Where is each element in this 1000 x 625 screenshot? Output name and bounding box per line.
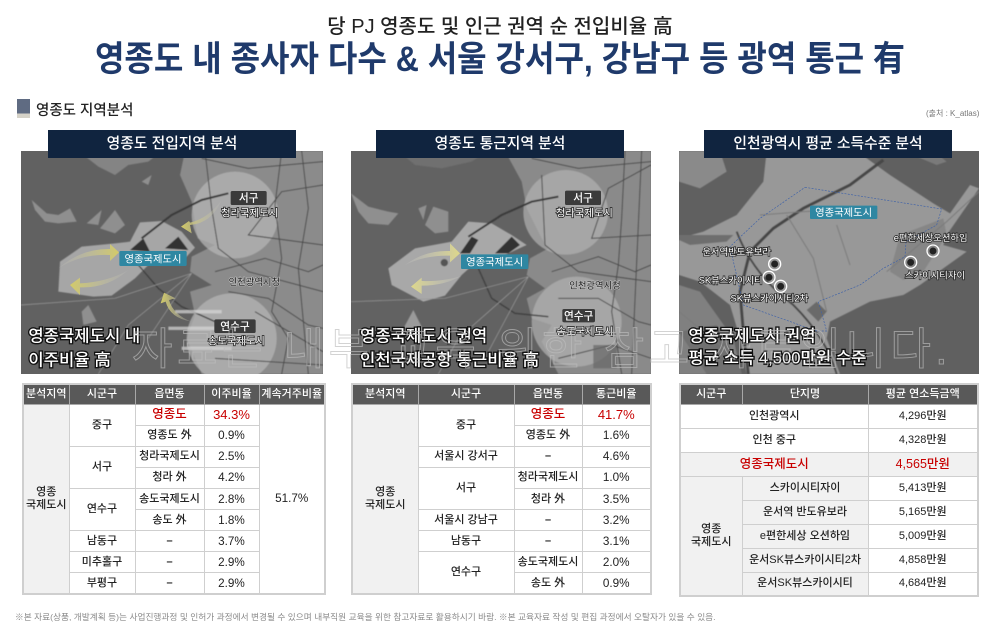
table: commute ratio: 송도 外 bbox=[531, 577, 565, 589]
section heading: 영종도 지역분석 bbox=[36, 103, 133, 119]
table: move-in ratio: 2.9% bbox=[218, 556, 245, 569]
label: Seo-gu bbox=[556, 191, 613, 220]
table: move-in ratio: 읍면동 bbox=[154, 388, 185, 400]
table: average income: 5,413만원 bbox=[899, 482, 947, 494]
table: commute ratio: 시군구 bbox=[451, 388, 481, 400]
caption: 인천국제공항 통근비율 高 bbox=[360, 351, 539, 370]
table: average income: 시군구 bbox=[696, 388, 726, 400]
table: average income: 영종국제도시 bbox=[740, 456, 809, 470]
label: Seo-gu: 서구 bbox=[239, 193, 259, 205]
table: commute ratio: 영종도 外 bbox=[526, 429, 570, 441]
table: average income bbox=[679, 383, 979, 597]
label: Yeongjong bbox=[810, 206, 877, 219]
panel heading: move-in analysis: 영종도 전입지역 분석 bbox=[107, 136, 237, 152]
label: Yeonsu-gu: 송도국제도시 bbox=[208, 335, 265, 347]
table: move-in ratio: 연수구 bbox=[87, 503, 117, 515]
label: Seo-gu: 청라국제도시 bbox=[221, 207, 278, 219]
table: move-in ratio bbox=[22, 383, 326, 595]
table: move-in ratio: 청라 外 bbox=[152, 471, 187, 483]
panel heading: commute analysis bbox=[376, 130, 624, 158]
table: average income: 4,565만원 bbox=[896, 456, 950, 470]
label: city hall: 인천광역시청 bbox=[569, 279, 621, 290]
table: commute ratio: 청라 外 bbox=[531, 493, 565, 505]
markers: apartment complexes bbox=[763, 245, 939, 292]
label: city hall: 인천광역시청 bbox=[229, 276, 280, 287]
arrow: from Cheongna bbox=[181, 200, 222, 233]
table: commute ratio: 읍면동 bbox=[533, 388, 563, 400]
source note: (출처 : K_atlas) bbox=[926, 109, 979, 118]
label: Yeongjong bbox=[461, 254, 528, 269]
table: commute ratio: 영종도 bbox=[531, 407, 565, 421]
labels: complexes: SK뷰스카이시티2차 bbox=[730, 293, 809, 304]
arrow: from Songdo bbox=[161, 293, 192, 322]
label: Seo-gu: 청라국제도시 bbox=[556, 208, 613, 220]
title: 영종도 내 종사자 다수 & 서울 강서구, 강남구 등 광역 통근 有 bbox=[95, 40, 905, 79]
table: average income: e편한세상 오션하임 bbox=[760, 530, 850, 542]
footnote: ※본 자료(상품, 개발계획 등)는 사업진행과정 및 인허가 과정에서 변경될 수 있으며 내부직원 교육을 위한 참고자료로 활용하시기 바람. ※본 교육자료 작성 및 편집 과정에서 오탈자가 있을 수 있음. bbox=[15, 612, 716, 622]
table: commute ratio: 41.7% bbox=[598, 407, 635, 422]
table: commute ratio: 서울시 강서구 bbox=[434, 450, 498, 462]
table: commute ratio: 통근비율 bbox=[596, 388, 636, 400]
table: move-in ratio: 송도 外 bbox=[152, 514, 187, 526]
table: move-in ratio: 계속거주비율 bbox=[261, 388, 322, 400]
arrow: airport outgoing bbox=[70, 270, 128, 295]
table: average income: 국제도시 bbox=[691, 536, 731, 548]
boundary: Yeongjong district bbox=[730, 187, 942, 331]
table: average income: 4,684만원 bbox=[899, 577, 947, 589]
caption: 영종국제도시 권역 bbox=[688, 327, 816, 346]
table: move-in ratio: 4.2% bbox=[218, 471, 245, 484]
table: move-in ratio: 2.5% bbox=[218, 450, 245, 463]
label: Yeonsu-gu: 송도국제도시 bbox=[556, 326, 614, 338]
caption: 영종국제도시 내 bbox=[28, 327, 140, 346]
table: commute ratio: 중구 bbox=[456, 419, 476, 431]
panel heading: commute analysis: 영종도 통근지역 분석 bbox=[435, 136, 565, 152]
label: Yeongjong: 영종국제도시 bbox=[124, 253, 182, 265]
table: move-in ratio: 부평구 bbox=[87, 577, 117, 589]
table: average income: 인천 중구 bbox=[752, 434, 796, 446]
label: Yeonsu-gu: 연수구 bbox=[564, 309, 594, 322]
table: move-in ratio: 0.9% bbox=[218, 429, 245, 442]
table: commute ratio: 남동구 bbox=[451, 535, 481, 547]
table: move-in ratio: 국제도시 bbox=[26, 499, 66, 511]
table: commute ratio: 서울시 강남구 bbox=[434, 514, 498, 526]
label: Yeonsu-gu: 연수구 bbox=[220, 320, 250, 333]
caption bbox=[28, 327, 140, 370]
labels: complexes bbox=[699, 232, 968, 304]
labels: complexes: 운서역반도유보라 bbox=[702, 247, 771, 257]
table: move-in ratio: 영종도 bbox=[152, 407, 187, 421]
table: commute ratio: 송도국제도시 bbox=[518, 556, 578, 568]
table: move-in ratio: 34.3% bbox=[213, 407, 250, 422]
table: move-in ratio: 이주비율 bbox=[211, 388, 252, 400]
table: commute ratio: 분석지역 bbox=[365, 388, 405, 400]
arrow: west outgoing bbox=[58, 244, 119, 268]
table: commute ratio: 청라국제도시 bbox=[518, 471, 578, 483]
table: move-in ratio: 서구 bbox=[92, 461, 112, 473]
labels: complexes: e편한세상오션하임 bbox=[894, 232, 968, 243]
table: commute ratio: 영종 bbox=[375, 486, 395, 498]
table: average income: 운서SK뷰스카이시티 bbox=[757, 577, 853, 589]
table: average income: 스카이시티자이 bbox=[770, 482, 840, 494]
map: income level bbox=[679, 151, 979, 374]
table: move-in ratio: 2.9% bbox=[218, 577, 245, 590]
table: commute ratio: – bbox=[545, 535, 551, 547]
caption bbox=[688, 327, 866, 368]
table: move-in ratio: 시군구 bbox=[87, 388, 117, 400]
table: move-in ratio: 1.8% bbox=[218, 514, 245, 527]
panel heading: income analysis bbox=[704, 130, 952, 158]
caption bbox=[360, 327, 539, 370]
table: move-in ratio: 중구 bbox=[92, 419, 112, 431]
table: average income: 단지명 bbox=[790, 388, 820, 400]
table: average income: 평균 연소득금액 bbox=[886, 388, 960, 400]
label: Yeongjong bbox=[119, 251, 187, 266]
table: average income: 영종 bbox=[701, 523, 721, 535]
icon: section marker bbox=[17, 99, 30, 118]
table: commute ratio: 4.6% bbox=[603, 450, 630, 463]
table: move-in ratio: 송도국제도시 bbox=[139, 493, 200, 505]
arrow: to airport bbox=[405, 243, 460, 265]
subtitle: 당 PJ 영종도 및 인근 권역 순 전입비율 高 bbox=[327, 16, 673, 38]
panel heading: move-in analysis bbox=[48, 130, 296, 158]
label: Seo-gu: 서구 bbox=[573, 193, 593, 205]
table: move-in ratio: – bbox=[166, 556, 173, 568]
caption: 이주비율 高 bbox=[28, 351, 111, 370]
label: Seo-gu bbox=[221, 191, 278, 219]
labels: complexes: 스카이시티자이 bbox=[905, 270, 965, 280]
table: move-in ratio: 2.8% bbox=[218, 493, 245, 506]
table: average income: 운서SK뷰스카이시티2차 bbox=[749, 554, 861, 566]
table: average income: 5,165만원 bbox=[899, 506, 947, 518]
label: Yeonsu-gu bbox=[208, 319, 265, 347]
table: commute ratio: – bbox=[545, 450, 551, 462]
label: Yeonsu-gu bbox=[556, 309, 614, 338]
table: move-in ratio: 51.7% bbox=[275, 492, 308, 505]
table: average income: 4,328만원 bbox=[899, 434, 947, 446]
labels: complexes: SK뷰스카이시티 bbox=[699, 276, 763, 286]
table: commute ratio bbox=[351, 383, 652, 595]
label: Yeongjong: 영종국제도시 bbox=[815, 207, 872, 219]
table: move-in ratio: 미추홀구 bbox=[82, 556, 122, 568]
table: commute ratio: 국제도시 bbox=[365, 499, 405, 511]
table: average income: 운서역 반도유보라 bbox=[763, 506, 847, 518]
arrow: to island south bbox=[411, 276, 462, 294]
table: move-in ratio: 3.7% bbox=[218, 535, 245, 548]
table: commute ratio: – bbox=[545, 514, 551, 526]
table: commute ratio: 3.1% bbox=[603, 535, 630, 548]
table: move-in ratio: – bbox=[166, 577, 173, 589]
table: move-in ratio: 남동구 bbox=[87, 535, 117, 547]
table: commute ratio: 서구 bbox=[456, 482, 476, 494]
table: move-in ratio: – bbox=[166, 535, 173, 547]
panel heading: income analysis: 인천광역시 평균 소득수준 분석 bbox=[733, 136, 923, 152]
table: average income: 4,858만원 bbox=[899, 554, 947, 566]
table: commute ratio: 2.0% bbox=[603, 556, 630, 569]
table: commute ratio: 1.6% bbox=[603, 429, 630, 442]
caption: 평균 소득 4,500만원 수준 bbox=[688, 349, 866, 368]
table: commute ratio: 3.5% bbox=[603, 493, 630, 506]
table: average income: 4,296만원 bbox=[899, 410, 947, 422]
table: commute ratio: 0.9% bbox=[603, 577, 630, 590]
map: commute regions bbox=[351, 151, 651, 374]
table: commute ratio: 3.2% bbox=[603, 514, 630, 527]
table: move-in ratio: 영종 bbox=[36, 486, 56, 498]
table: commute ratio: 연수구 bbox=[451, 566, 481, 578]
table: move-in ratio: 청라국제도시 bbox=[139, 450, 200, 462]
table: average income: 인천광역시 bbox=[749, 410, 800, 422]
table: commute ratio: 1.0% bbox=[603, 471, 630, 484]
caption: 영종국제도시 권역 bbox=[360, 327, 487, 346]
table: average income: 5,009만원 bbox=[899, 530, 947, 542]
table: move-in ratio: 분석지역 bbox=[26, 388, 66, 400]
table: move-in ratio: 영종도 外 bbox=[147, 429, 192, 441]
label: Yeongjong: 영종국제도시 bbox=[466, 256, 523, 268]
map: move-in regions bbox=[21, 151, 323, 374]
